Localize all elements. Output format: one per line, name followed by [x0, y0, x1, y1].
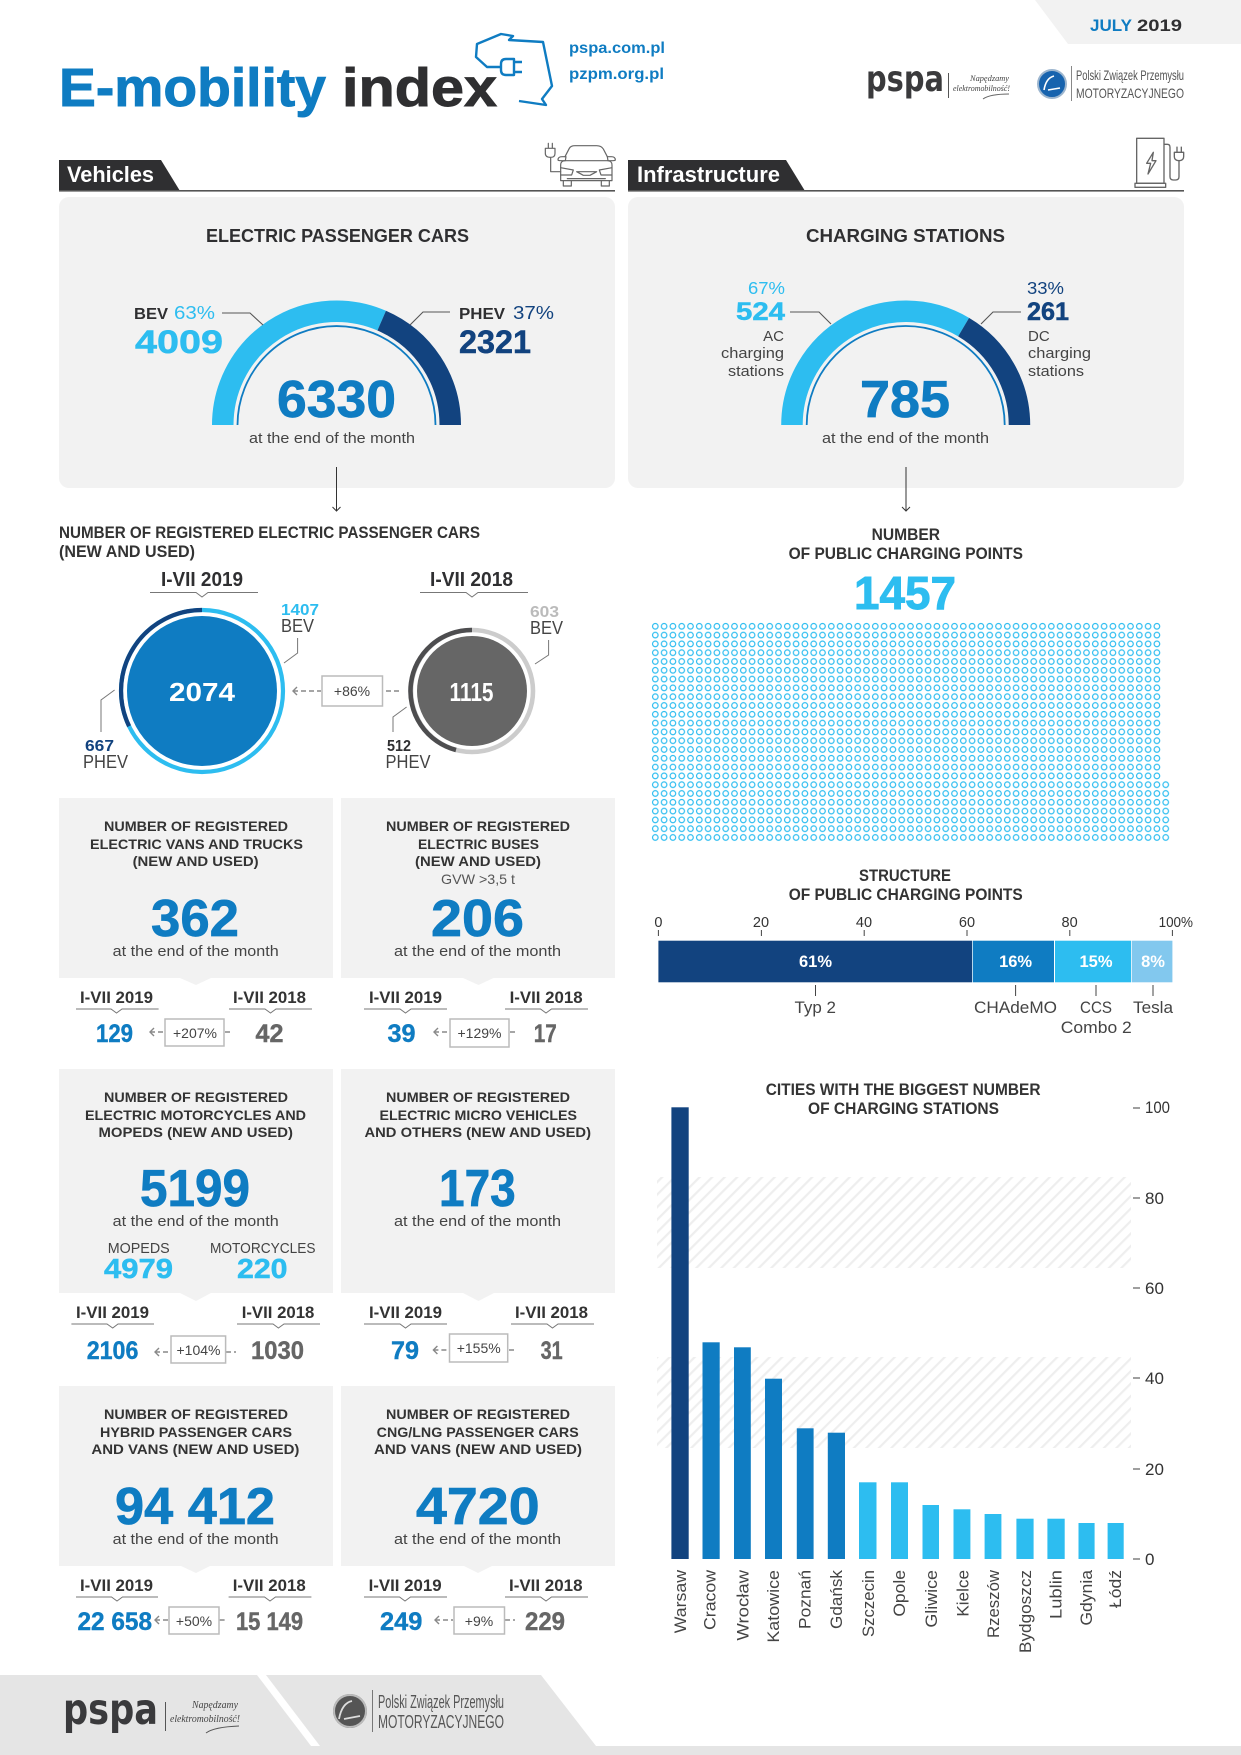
heading: registered electric passenger cars: NUMBER OF REGISTERED ELECTRIC PASSENGER CARS: [59, 524, 480, 542]
percent axis: 100%: [1159, 915, 1193, 931]
comparison: hybrid cars and vans: I-VII 2018: [233, 1576, 306, 1595]
comparison: micro vehicles: I-VII 2018: [515, 1303, 588, 1322]
comparison: vans and trucks: 129: [96, 1020, 133, 1048]
panel title: HYBRID PASSENGER CARS: [100, 1424, 292, 1440]
comparison: vans and trucks: 42: [256, 1020, 284, 1048]
comparison: CNG/LNG cars and vans: 249: [380, 1608, 422, 1636]
AC label: 524: [736, 298, 785, 326]
AC label: AC: [763, 328, 784, 345]
panel title: AND VANS (NEW AND USED): [374, 1441, 582, 1457]
city labels: Warsaw: [671, 1569, 690, 1633]
hatched band lower: [657, 1357, 1131, 1448]
label: 2018 PHEV: PHEV: [386, 752, 430, 772]
city labels: Gliwice: [922, 1570, 941, 1628]
comparison: CNG/LNG cars and vans: +9%: [465, 1613, 493, 1629]
label: 2019 PHEV: PHEV: [83, 752, 128, 772]
city labels: Gdańsk: [827, 1570, 846, 1629]
panel heading: ELECTRIC PASSENGER CARS: [206, 226, 469, 246]
label: 2018 BEV: [530, 604, 563, 664]
AC label: stations: [728, 363, 784, 380]
label: 2019 PHEV: [83, 690, 128, 772]
label: 2018 BEV: 603: [530, 604, 559, 621]
comparison: vans and trucks: +207%: [173, 1025, 217, 1041]
date tab: JULY: [1090, 16, 1133, 35]
icon: Poland outline with plug: [476, 34, 552, 105]
donut: 2018 registrations: [410, 630, 533, 752]
logo: pspa footer: Napędzamy: [191, 1700, 239, 1711]
caption: at the end of the month: [394, 1531, 561, 1548]
title: [59, 58, 497, 118]
comparison: buses: +129%: [458, 1025, 501, 1041]
comparison: vans and trucks: [76, 988, 312, 1048]
city labels: Wrocław: [734, 1569, 752, 1641]
comparison: micro vehicles: I-VII 2019: [369, 1303, 442, 1322]
segment: Typ 2: 61%: [799, 953, 832, 971]
period label 2019: [150, 569, 258, 597]
gauge: BEV and PHEV: [222, 311, 450, 425]
segment: Tesla: Tesla: [1133, 998, 1174, 1017]
heading: registered electric passenger cars: [59, 524, 480, 561]
caption: at the end of the month: [394, 1213, 561, 1230]
comparison: hybrid cars and vans: I-VII 2019: [80, 1576, 153, 1595]
icon: electric car: [545, 143, 615, 186]
panel title: (NEW AND USED): [415, 853, 541, 869]
city labels: Poznań: [796, 1570, 815, 1629]
comparison: buses: [364, 988, 588, 1048]
comparison: micro vehicles: 79: [391, 1337, 419, 1365]
comparison: micro vehicles: 31: [541, 1337, 563, 1365]
chart heading: [789, 867, 1023, 904]
percent axis: 0: [654, 915, 662, 931]
panel: CNG/LNG cars and vans: [341, 1386, 615, 1573]
mopeds: MOPEDS: [108, 1241, 170, 1257]
panel title: GVW >3,5 t: [441, 871, 515, 887]
section heading: Infrastructure: [628, 160, 1184, 192]
value axis: 40: [1145, 1369, 1164, 1388]
stacked bar: structure of charging points: [654, 867, 1193, 1037]
panel: hybrid cars and vans: [59, 1386, 333, 1573]
panel: micro vehicles: [341, 1069, 615, 1301]
value axis: [1133, 1098, 1170, 1569]
DC label: charging: [1028, 345, 1091, 362]
panel: electric passenger cars: [59, 197, 615, 488]
panel: buses: [341, 798, 615, 985]
motorcycles: [210, 1241, 316, 1284]
logo: PZPM header: Polski Związek Przemysłu: [1076, 67, 1184, 83]
panel title: ELECTRIC MOTORCYCLES AND: [85, 1107, 306, 1123]
caption: at the end of the month: [822, 430, 989, 447]
arrow: stations panel down: [902, 467, 910, 511]
comparison: motorcycles and mopeds: [71, 1303, 320, 1365]
donut: 2019 registrations: 2074: [169, 677, 236, 707]
comparison: +86%: [293, 676, 400, 706]
segment: Typ 2: Typ 2: [794, 998, 836, 1017]
panel title: AND VANS (NEW AND USED): [91, 1441, 299, 1457]
panel title: NUMBER OF REGISTERED: [386, 1089, 570, 1105]
value axis: 100: [1145, 1098, 1170, 1117]
number of points: 1457: [854, 567, 956, 619]
segment: Tesla: 8%: [1141, 953, 1165, 971]
website links: [569, 40, 665, 83]
heading: public charging points: OF PUBLIC CHARGING POINTS: [789, 545, 1023, 563]
comparison: motorcycles and mopeds: I-VII 2018: [242, 1303, 314, 1322]
segment: CHAdeMO: [973, 941, 1057, 1017]
comparison: micro vehicles: [364, 1303, 594, 1365]
logo: pspa header: pspa: [866, 59, 944, 100]
logo: pspa header: elektromobilność!: [953, 84, 1010, 93]
total: 173: [439, 1160, 516, 1218]
panel title: ELECTRIC BUSES: [418, 836, 539, 852]
segment: CCS Combo 2: 15%: [1079, 953, 1113, 971]
panel title: AND OTHERS (NEW AND USED): [364, 1124, 591, 1140]
city labels: Szczecin: [859, 1570, 878, 1637]
BEV label: [134, 303, 223, 360]
title: index: [342, 58, 497, 118]
segment: Typ 2: [658, 941, 972, 1017]
AC label: [721, 278, 785, 380]
panel title: NUMBER OF REGISTERED: [386, 1406, 570, 1422]
total: 362: [151, 890, 239, 948]
period label 2018: [420, 569, 528, 597]
caption: at the end of the month: [113, 943, 279, 960]
BEV label: 63%: [174, 303, 215, 323]
dot grid: one circle per charging point: [651, 622, 1170, 842]
DC label: [1027, 278, 1091, 380]
panel: charging stations: [628, 197, 1184, 488]
caption: at the end of the month: [113, 1213, 279, 1230]
comparison: hybrid cars and vans: 22 658: [78, 1608, 152, 1636]
AC label: 67%: [748, 278, 785, 298]
segment: CHAdeMO: CHAdeMO: [974, 998, 1057, 1017]
heading: public charging points: [789, 526, 1023, 563]
section heading: Vehicles: Vehicles: [67, 162, 154, 187]
label: 2019 BEV: [281, 602, 319, 663]
label: 2019 BEV: BEV: [281, 616, 314, 636]
logo: pspa header: [866, 59, 1010, 100]
panel: vans and trucks: [59, 798, 333, 985]
panel title: [90, 818, 303, 869]
logo: PZPM header: [1038, 66, 1184, 101]
label: 2018 PHEV: [386, 707, 430, 772]
comparison: micro vehicles: +155%: [457, 1340, 501, 1356]
city labels: Bydgoszcz: [1016, 1570, 1035, 1653]
AC label: charging: [721, 345, 784, 362]
heading: registered electric passenger cars: (NEW AND USED): [59, 543, 195, 561]
hatched band upper: [657, 1177, 1131, 1268]
caption: at the end of the month: [249, 430, 415, 447]
value axis: 20: [1145, 1460, 1164, 1479]
value axis: 80: [1145, 1189, 1164, 1208]
comparison: vans and trucks: I-VII 2019: [80, 988, 153, 1007]
logo: PZPM footer: MOTORYZACYJNEGO: [378, 1712, 504, 1732]
chart heading: CITIES WITH THE BIGGEST NUMBER: [766, 1081, 1041, 1099]
total: 94 412: [115, 1478, 275, 1536]
gauge: AC and DC: [790, 311, 1021, 425]
city labels: Kielce: [954, 1570, 972, 1617]
total: 5199: [140, 1160, 250, 1218]
comparison: motorcycles and mopeds: I-VII 2019: [76, 1303, 149, 1322]
segment: Tesla: [1132, 941, 1174, 1017]
comparison: hybrid cars and vans: 15 149: [236, 1608, 303, 1636]
comparison: buses: 17: [534, 1020, 557, 1048]
logo: PZPM header: MOTORYZACYJNEGO: [1076, 85, 1184, 101]
section heading: Infrastructure: Infrastructure: [637, 162, 780, 187]
comparison: buses: I-VII 2019: [369, 988, 442, 1007]
logo: pspa header: Napędzamy: [969, 74, 1009, 83]
label: 2018 PHEV: 512: [387, 738, 411, 755]
period label 2019: I-VII 2019: [161, 569, 243, 591]
BEV label: BEV: [134, 306, 168, 323]
comparison: hybrid cars and vans: +50%: [176, 1613, 212, 1629]
comparison: buses: I-VII 2018: [510, 988, 583, 1007]
comparison: CNG/LNG cars and vans: I-VII 2019: [369, 1576, 442, 1595]
label: 2019 PHEV: 667: [85, 738, 114, 755]
icon: charging station: [1135, 138, 1184, 187]
PHEV label: 37%: [513, 303, 554, 323]
total: 6330: [277, 371, 396, 429]
comparison: motorcycles and mopeds: 1030: [251, 1337, 304, 1365]
label: 2019 BEV: 1407: [281, 602, 319, 619]
footer band: [0, 1675, 1241, 1755]
logo: PZPM footer: [333, 1690, 504, 1732]
city labels: Cracow: [700, 1569, 720, 1630]
panel title: NUMBER OF REGISTERED: [104, 1089, 288, 1105]
percent axis: 40: [856, 915, 872, 931]
percent axis: 60: [959, 915, 975, 931]
comparison: vans and trucks: I-VII 2018: [233, 988, 306, 1007]
panel title: ELECTRIC VANS AND TRUCKS: [90, 836, 303, 852]
comparison: +86%: +86%: [334, 683, 370, 699]
city labels: Łódź: [1106, 1570, 1125, 1608]
comparison: CNG/LNG cars and vans: [364, 1576, 588, 1636]
panel title: ELECTRIC MICRO VEHICLES: [380, 1107, 577, 1123]
DC label: 261: [1027, 298, 1069, 326]
panel title: [91, 1406, 299, 1457]
caption: at the end of the month: [113, 1531, 279, 1548]
panel title: (NEW AND USED): [133, 853, 259, 869]
bars: [671, 1107, 1124, 1559]
caption: at the end of the month: [394, 943, 561, 960]
logo: PZPM footer: Polski Związek Przemysłu: [378, 1692, 504, 1712]
panel heading: CHARGING STATIONS: [806, 226, 1005, 246]
comparison: buses: 39: [388, 1020, 416, 1048]
PHEV label: 2321: [459, 324, 531, 360]
percent axis: 80: [1062, 915, 1078, 931]
value axis: 0: [1145, 1550, 1154, 1569]
panel title: CNG/LNG PASSENGER CARS: [377, 1424, 579, 1440]
donut: 2019 registrations: [121, 610, 283, 772]
panel title: [364, 1089, 591, 1140]
logo: pspa footer: elektromobilność!: [170, 1714, 240, 1725]
segment: CCS Combo 2: Combo 2: [1061, 1018, 1132, 1037]
city labels: Rzeszów: [984, 1569, 1003, 1638]
panel title: NUMBER OF REGISTERED: [104, 1406, 288, 1422]
PHEV label: [459, 303, 554, 360]
website links: pzpm.org.pl: [569, 66, 664, 83]
logo: pspa footer: pspa: [63, 1685, 158, 1735]
heading: public charging points: NUMBER: [872, 526, 940, 544]
comparison: CNG/LNG cars and vans: I-VII 2018: [509, 1576, 582, 1595]
date tab: 2019: [1137, 16, 1182, 35]
total: 206: [431, 890, 524, 948]
segment: CCS Combo 2: CCS: [1080, 998, 1112, 1017]
city labels: Katowice: [764, 1570, 783, 1643]
panel title: NUMBER OF REGISTERED: [386, 818, 570, 834]
BEV label: 4009: [135, 324, 223, 360]
DC label: stations: [1028, 363, 1084, 380]
segment: CCS Combo 2: [1055, 941, 1132, 1037]
title: E-mobility: [59, 58, 326, 118]
chart heading: OF PUBLIC CHARGING POINTS: [789, 886, 1023, 904]
comparison: motorcycles and mopeds: 2106: [87, 1337, 138, 1365]
motorcycles: MOTORCYCLES: [210, 1241, 316, 1257]
chart heading: OF CHARGING STATIONS: [808, 1100, 999, 1118]
DC label: DC: [1028, 328, 1050, 345]
panel title: MOPEDS (NEW AND USED): [98, 1124, 293, 1140]
value axis: 60: [1145, 1279, 1164, 1298]
chart heading: STRUCTURE: [859, 867, 951, 885]
PHEV label: PHEV: [459, 306, 505, 323]
comparison: CNG/LNG cars and vans: 229: [525, 1608, 565, 1636]
mopeds: [104, 1241, 173, 1284]
period label 2018: I-VII 2018: [430, 569, 513, 591]
panel title: [374, 1406, 582, 1457]
date tab: [1035, 0, 1241, 44]
label: 2018 BEV: BEV: [530, 618, 563, 638]
segment: CHAdeMO: 16%: [999, 953, 1032, 971]
bar chart: cities with most charging stations: [657, 1081, 1170, 1653]
arrow: cars panel down: [332, 467, 340, 511]
section heading: Vehicles: [59, 160, 615, 192]
panel title: [85, 1089, 306, 1140]
panel title: [386, 818, 570, 887]
mopeds: 4979: [104, 1253, 173, 1284]
city labels: Lublin: [1047, 1570, 1066, 1619]
logo: pspa footer: [63, 1685, 240, 1735]
chart heading: [766, 1081, 1041, 1118]
comparison: hybrid cars and vans: [76, 1576, 311, 1636]
panel: motorcycles and mopeds: [59, 1069, 333, 1301]
percent axis: 20: [753, 915, 769, 931]
website links: pspa.com.pl: [569, 40, 665, 57]
percent axis: [654, 915, 1193, 936]
comparison: motorcycles and mopeds: +104%: [177, 1342, 220, 1358]
total: 4720: [416, 1478, 540, 1536]
city labels: Gdynia: [1077, 1569, 1096, 1626]
motorcycles: 220: [237, 1253, 288, 1284]
total: 785: [860, 371, 950, 429]
city labels: [671, 1569, 1125, 1653]
panel title: NUMBER OF REGISTERED: [104, 818, 288, 834]
DC label: 33%: [1027, 278, 1064, 298]
city labels: Opole: [890, 1570, 909, 1617]
donut: 2018 registrations: 1115: [450, 677, 494, 707]
